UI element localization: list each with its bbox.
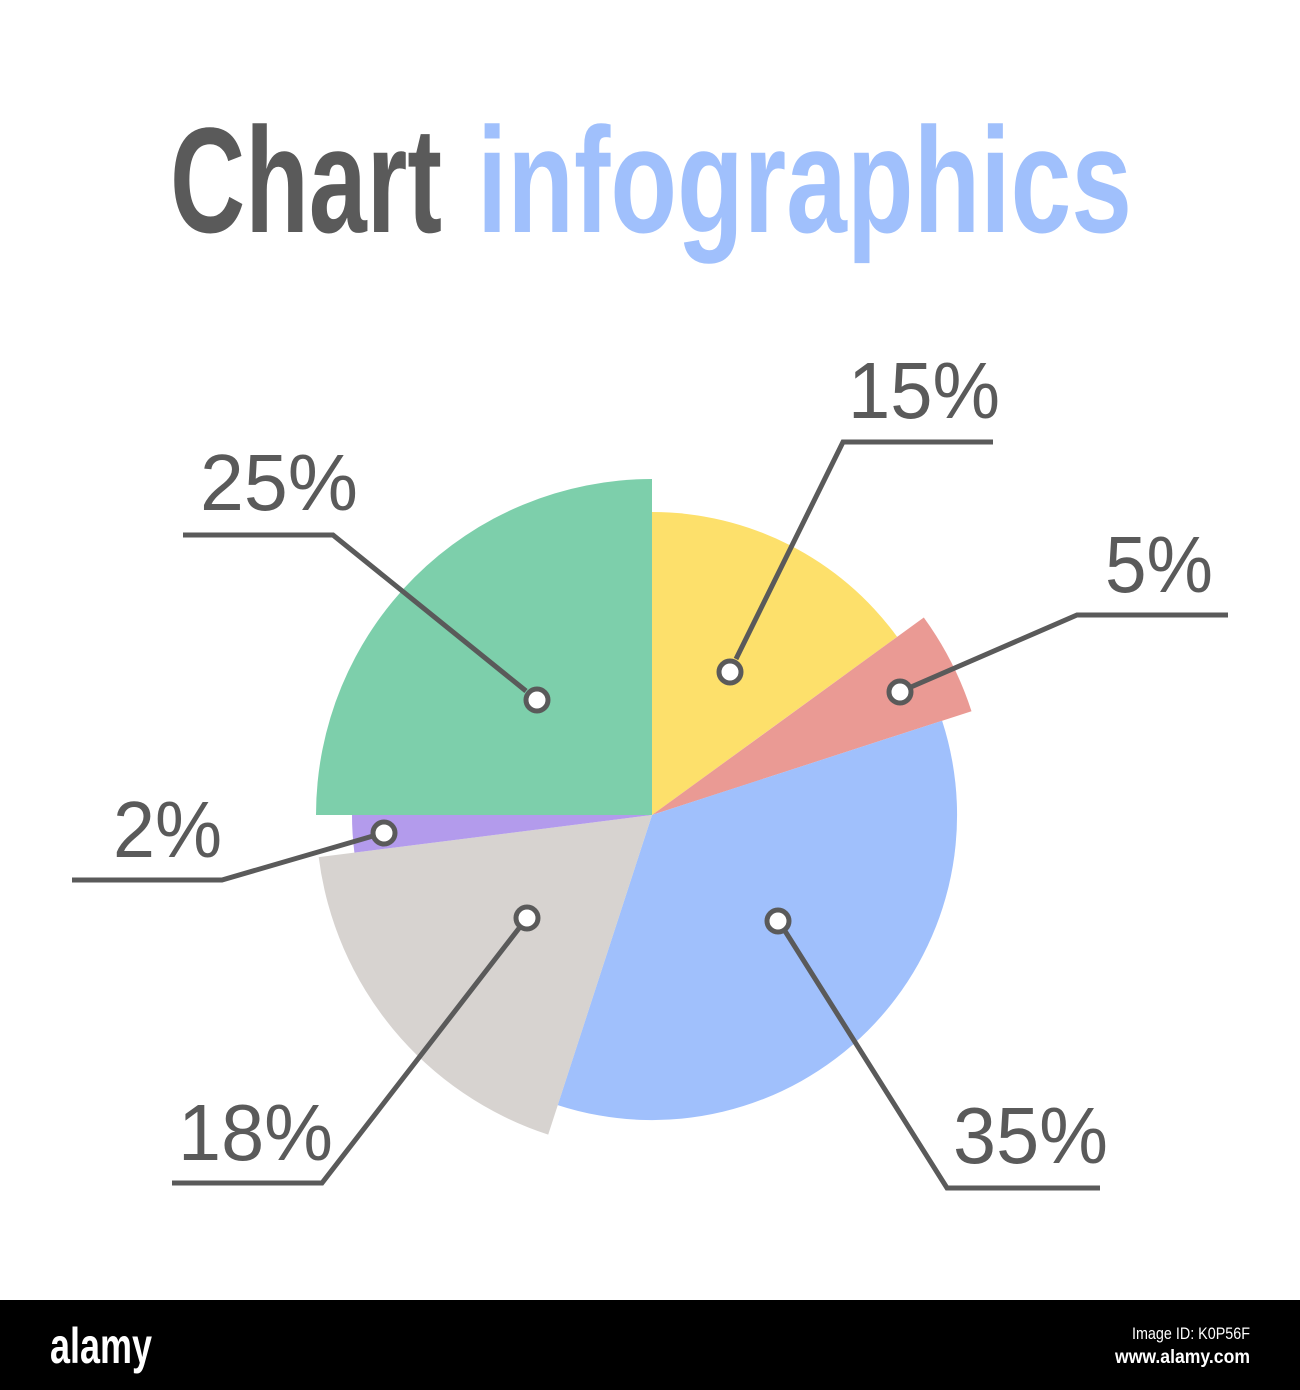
callout: 5%: [889, 520, 1228, 703]
callout: 2%: 2%: [113, 785, 222, 874]
pie chart: [316, 479, 972, 1135]
footer bar: www.alamy.com: [1114, 1347, 1250, 1368]
slice: grey 18%: [319, 815, 652, 1135]
slice: purple 2%: [352, 815, 652, 853]
footer bar: [0, 1300, 1300, 1390]
slice: red 5%: [652, 618, 972, 815]
footer bar: Image ID: K0P56F: [1132, 1324, 1250, 1343]
callout: 15%: 15%: [848, 346, 1000, 435]
callout: 25%: 25%: [200, 438, 358, 527]
callout: 18%: 18%: [178, 1088, 333, 1177]
title: [170, 96, 1132, 264]
callout: 18%: [172, 907, 538, 1183]
footer bar: alamy: [50, 1318, 152, 1374]
callout: 35%: 35%: [953, 1091, 1108, 1180]
slice: green 25%: [316, 479, 652, 815]
slice: yellow 15%: [652, 512, 897, 815]
callout: 35%: [767, 910, 1108, 1188]
title: Chart: [170, 96, 442, 264]
slice: blue 35%: [558, 721, 957, 1120]
callout: 2%: [72, 785, 395, 880]
callout: 5%: 5%: [1105, 520, 1213, 609]
callout: 15%: [719, 346, 1000, 683]
callout: 25%: [183, 438, 548, 711]
